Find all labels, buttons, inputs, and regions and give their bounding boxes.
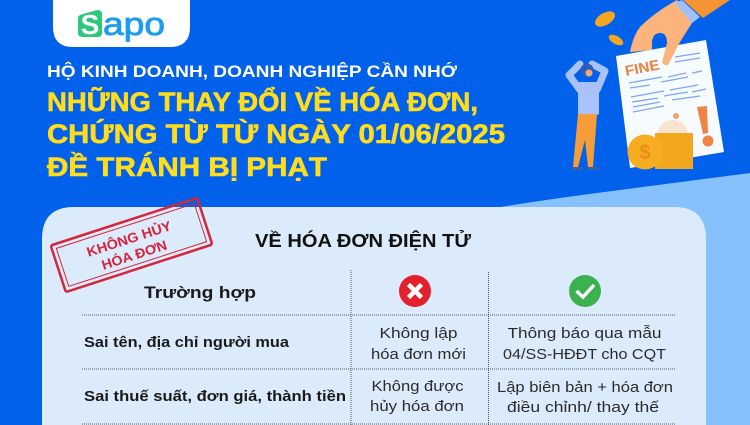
document: FINE (624, 57, 661, 80)
heading: subtitle: HỘ KINH DOANH, DOANH NGHIỆP CẦN NHỚ (47, 62, 458, 81)
coin stack and money bag (628, 113, 693, 170)
icon: exclamation mark (697, 106, 714, 146)
worried person (569, 64, 605, 170)
icon: red cross (399, 275, 431, 307)
hand (630, 0, 692, 65)
coin stack and money bag: $ (639, 142, 651, 164)
row 2 (84, 379, 673, 416)
row 1: Thông báo qua mẫu (508, 325, 662, 342)
row 2: Lập biên bản + hóa đơn (497, 380, 673, 396)
panel heading: VỀ HÓA ĐƠN ĐIỆN TỬ (255, 230, 472, 251)
row 2: hủy hóa đơn (370, 399, 464, 415)
illustration: fine notice (569, 0, 730, 170)
heading: yellow title: ĐỀ TRÁNH BỊ PHẠT (47, 151, 328, 182)
row 1 (84, 325, 666, 363)
logo tab (53, 0, 190, 47)
column header: case: Trường hợp (144, 283, 256, 302)
heading: yellow title: NHỮNG THAY ĐỔI VỀ HÓA ĐƠN, (47, 86, 478, 117)
document (616, 40, 724, 168)
row 1: Sai tên, địa chỉ người mua (84, 335, 290, 351)
table grid (82, 270, 675, 425)
row 1: 04/SS-HĐĐT cho CQT (503, 347, 666, 363)
stamp: không hủy hóa đơn: KHÔNG HỦY (85, 218, 173, 260)
panel: invoice table (42, 207, 706, 425)
icon: green check (569, 275, 601, 307)
heading: yellow title: CHỨNG TỪ TỪ NGÀY 01/06/2025 (47, 118, 505, 149)
heading: yellow title (47, 86, 505, 182)
sleeve (675, 0, 730, 23)
row 1: Không lập (380, 326, 458, 342)
row 2: Không được (372, 379, 464, 395)
stamp: không hủy hóa đơn (51, 198, 212, 292)
row 1: hóa đơn mới (371, 347, 466, 363)
light blue wave (400, 173, 750, 425)
logo mark: green S: S (81, 9, 99, 40)
row 2: Sai thuế suất, đơn giá, thành tiền (84, 389, 346, 405)
stamp: không hủy hóa đơn: HÓA ĐƠN (100, 238, 169, 273)
row 2: điều chỉnh/ thay thế (507, 400, 659, 416)
icon: falling coins (592, 8, 625, 47)
logo wordmark: apo (103, 6, 165, 42)
